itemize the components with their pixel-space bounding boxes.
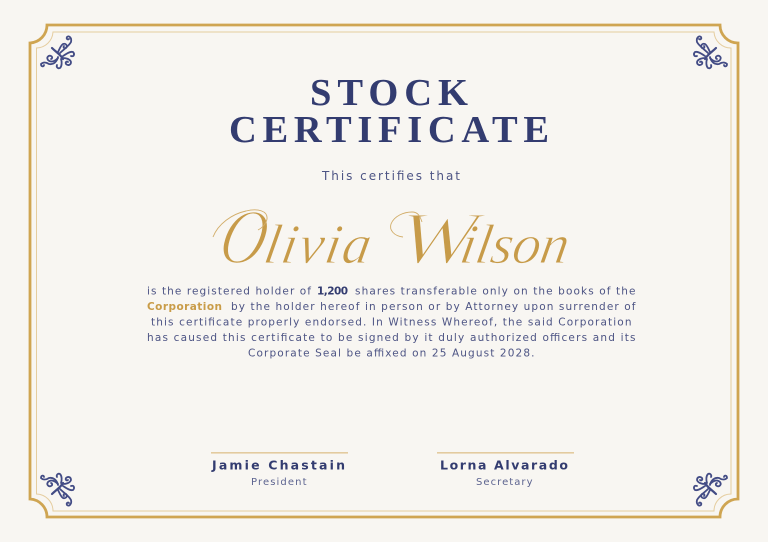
certificate body text: shares transferable only on the books of the — [355, 286, 636, 298]
ornament: top right — [694, 36, 727, 68]
signature: president: President — [251, 477, 307, 488]
signature: president: Jamie Chastain — [211, 458, 345, 472]
certificate body text — [147, 286, 636, 360]
title — [229, 72, 549, 151]
certificate body text: 1,200 — [317, 286, 348, 298]
certificate body text: has caused this certificate to be signed by it duly authorized officers and its — [147, 332, 636, 344]
recipient name: ilson — [456, 214, 575, 276]
signature: secretary — [437, 452, 574, 488]
recipient name — [212, 195, 575, 281]
signature: president — [211, 452, 348, 488]
title: STOCK — [310, 72, 468, 114]
certificate body text: by the holder hereof in person or by Attorney upon surrender of — [231, 301, 636, 313]
subtitle: This certifies that — [321, 169, 460, 183]
certificate body text: Corporate Seal be affixed on 25 August 2028. — [248, 348, 534, 360]
recipient name: W — [394, 198, 489, 280]
signature: secretary: Secretary — [476, 477, 533, 488]
ornament: bottom right — [694, 474, 727, 506]
title: CERTIFICATE — [229, 109, 549, 151]
ornament: bottom left — [41, 474, 74, 506]
certificate body text: is the registered holder of — [147, 286, 311, 298]
recipient name: livia — [260, 214, 377, 276]
ornament: top left — [41, 36, 74, 68]
recipient name: O — [212, 195, 277, 281]
certificate body text: this certificate properly endorsed. In Witness Whereof, the said Corporation — [151, 316, 632, 328]
inner gold frame — [36, 32, 731, 511]
signature: secretary: Lorna Alvarado — [440, 458, 568, 472]
certificate body text: Corporation — [147, 301, 222, 313]
